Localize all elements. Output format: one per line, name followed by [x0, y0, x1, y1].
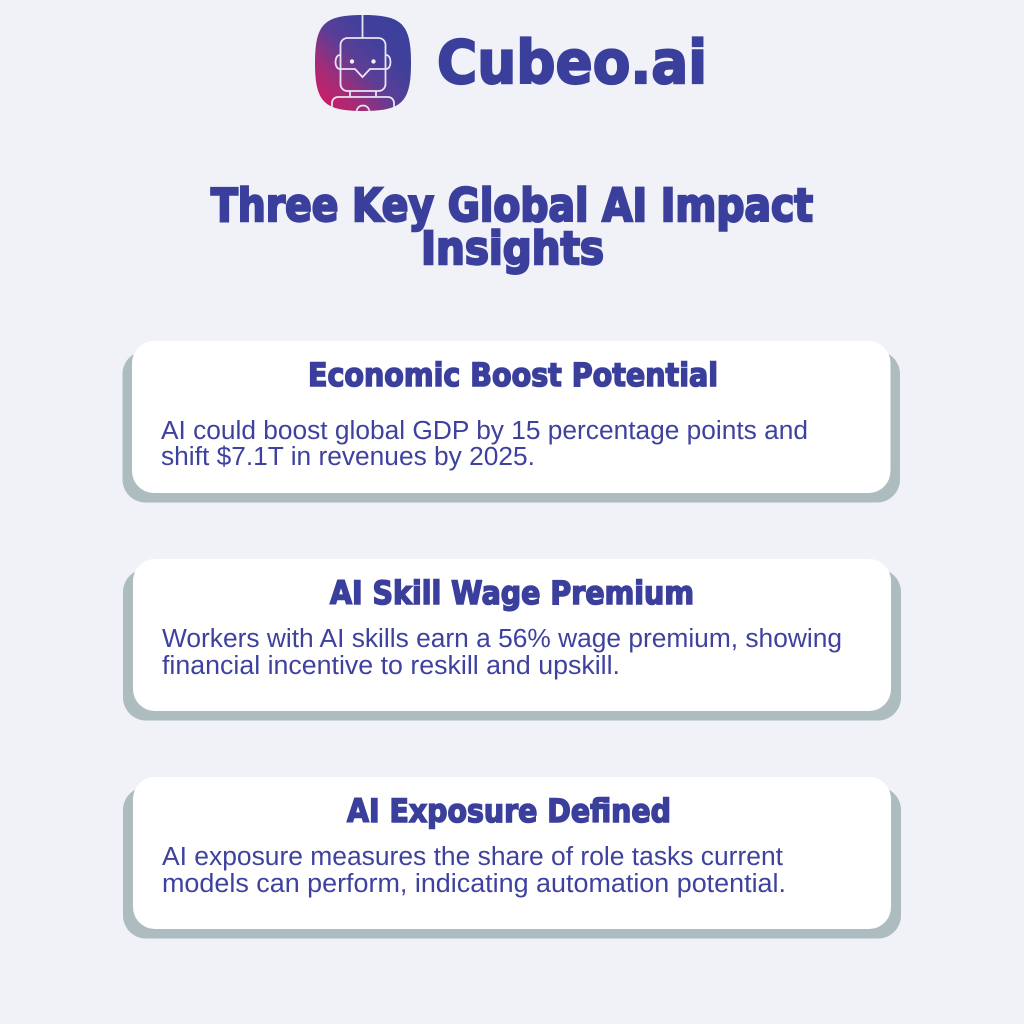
- title: [211, 179, 813, 275]
- text: wage premium description: financial incentive to reskill and upskill.: [162, 652, 620, 680]
- panel: AI exposure defined: [123, 777, 901, 938]
- logo wordmark: Cubeo.ai: [437, 28, 707, 98]
- text: exposure description: [162, 843, 786, 898]
- icon: robot logo: [315, 15, 411, 111]
- text: exposure description: models can perform, indicating automation potential.: [162, 870, 786, 898]
- text: exposure description: AI exposure measures the share of role tasks current: [162, 843, 783, 871]
- text: wage premium description: [162, 625, 842, 680]
- text: wage premium description: Workers with AI skills earn a 56% wage premium, showing: [162, 625, 842, 653]
- text: economic boost description: AI could boost global GDP by 15 percentage points and: [161, 417, 808, 445]
- panel: AI skill wage premium: [123, 559, 901, 720]
- text: economic boost description: shift $7.1T in revenues by 2025.: [161, 443, 535, 471]
- heading: economic boost potential: Economic Boost Potential: [308, 356, 718, 394]
- heading: AI skill wage premium: AI Skill Wage Premium: [330, 574, 694, 612]
- title: Insights: [421, 222, 604, 275]
- title: Three Key Global AI Impact: [211, 179, 813, 232]
- panel: economic boost potential: [122, 341, 900, 502]
- heading: AI exposure defined: AI Exposure Defined: [347, 792, 671, 830]
- text: economic boost description: [161, 417, 808, 471]
